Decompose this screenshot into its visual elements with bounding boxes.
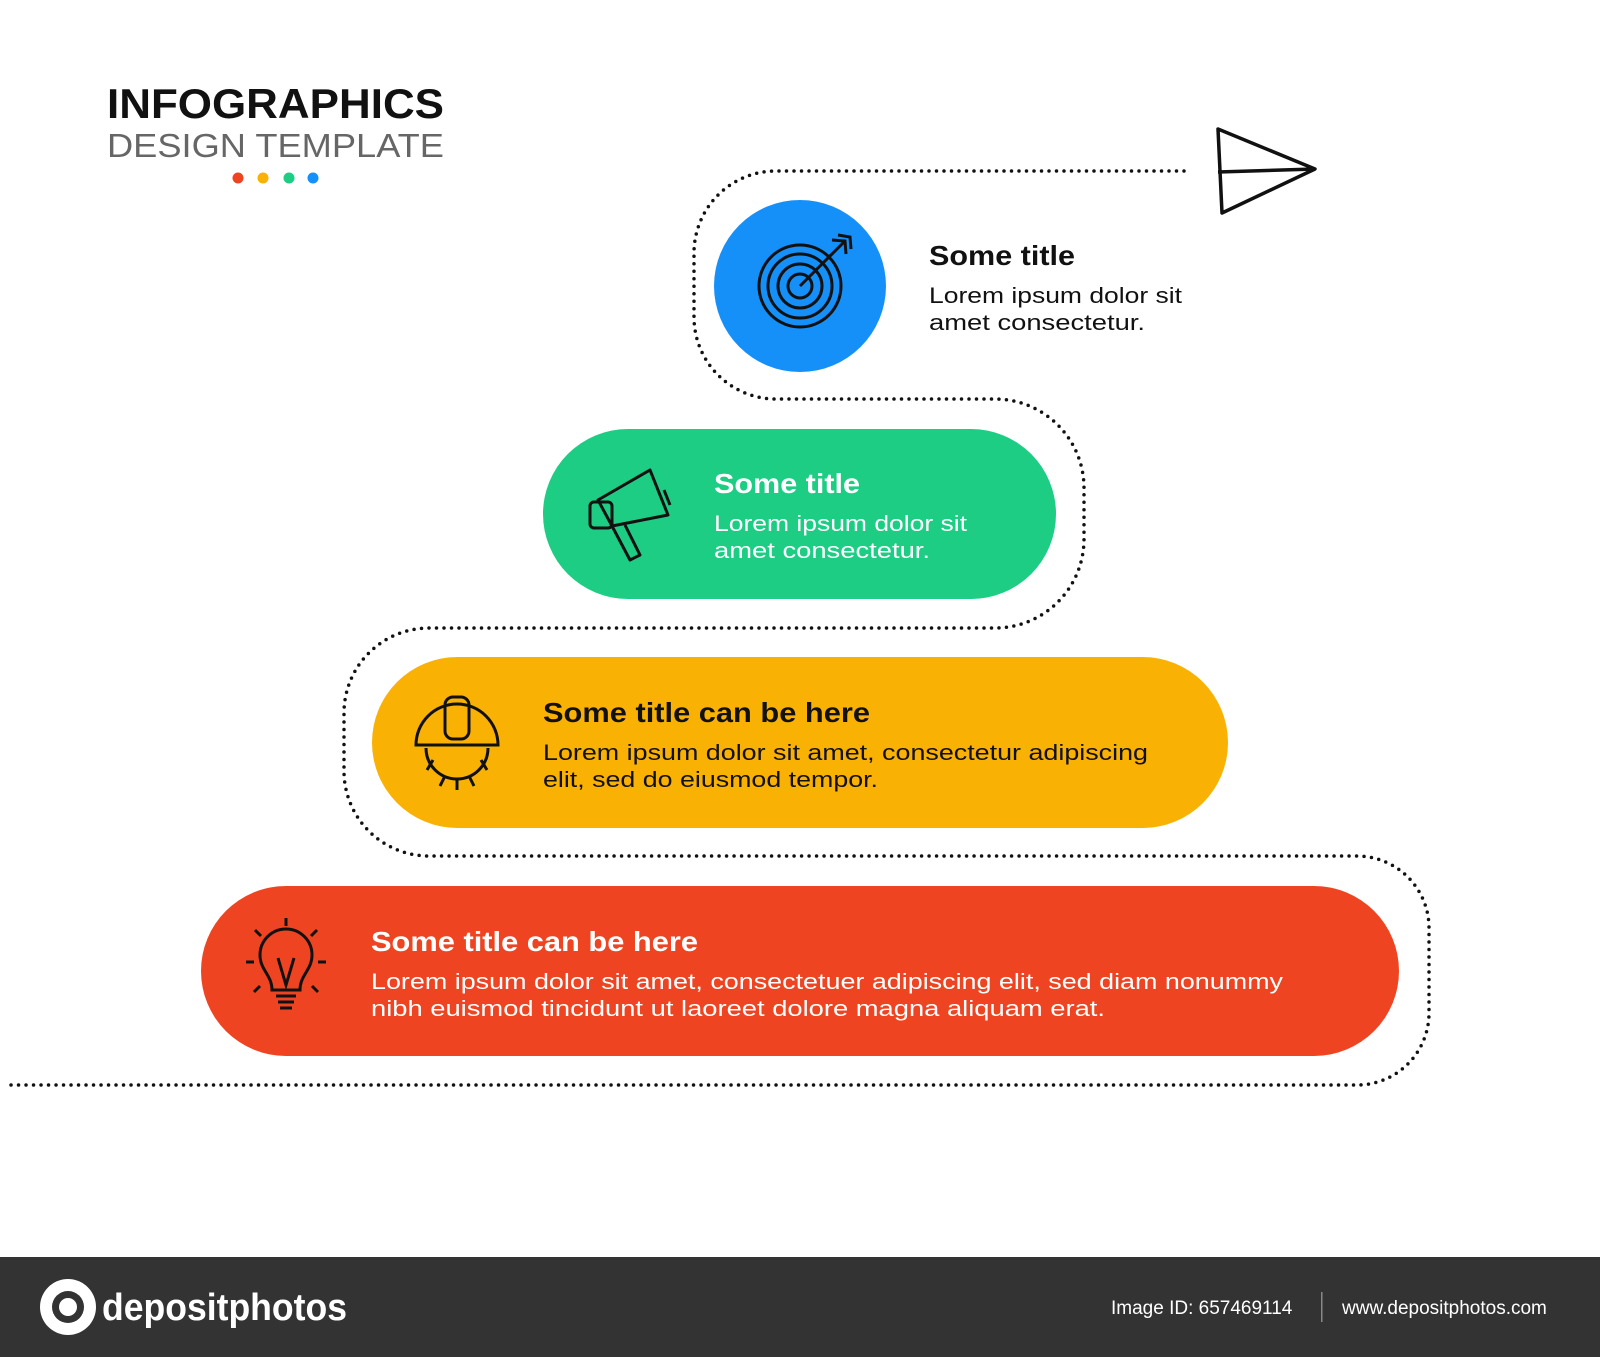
title: INFOGRAPHICS — [107, 80, 444, 127]
icon: target — [759, 235, 851, 327]
footer bar: Image ID: 657469114 — [1111, 1298, 1293, 1319]
text: step 4: Lorem ipsum dolor sit amet, consectetuer adipiscing elit, sed diam nonummy — [371, 969, 1283, 994]
text: step 1 — [929, 240, 1182, 335]
icon: light bulb — [246, 918, 326, 1008]
dotted path — [10, 171, 1429, 1085]
text: step 2: amet consectetur. — [714, 538, 930, 563]
icon: paper plane — [1218, 129, 1315, 213]
text: step 2 — [714, 468, 967, 563]
step 2: green pill — [543, 429, 1056, 599]
text: step 4: nibh euismod tincidunt ut laoreet dolore magna aliquam erat. — [371, 996, 1105, 1021]
icon: camera logo — [40, 1279, 96, 1335]
title: DESIGN TEMPLATE — [107, 127, 444, 164]
text: step 3 — [543, 697, 1148, 792]
text: step 4: Some title can be here — [371, 926, 698, 957]
step 1: blue circle — [714, 200, 1182, 372]
step 3: yellow pill — [372, 657, 1228, 828]
text: step 4 — [371, 926, 1283, 1021]
icon: megaphone — [590, 470, 670, 560]
footer bar: www.depositphotos.com — [1341, 1298, 1547, 1319]
title — [107, 80, 444, 184]
text: step 2: Some title — [714, 468, 860, 499]
footer bar — [0, 1257, 1600, 1357]
text: step 1: Lorem ipsum dolor sit — [929, 283, 1182, 308]
text: step 2: Lorem ipsum dolor sit — [714, 511, 967, 536]
text: step 1: Some title — [929, 240, 1075, 271]
text: step 3: elit, sed do eiusmod tempor. — [543, 767, 878, 792]
text: step 1: amet consectetur. — [929, 310, 1145, 335]
text: step 3: Lorem ipsum dolor sit amet, consectetur adipiscing — [543, 740, 1148, 765]
step 4: red pill — [201, 886, 1399, 1056]
icon: helmet gear — [416, 697, 498, 790]
text: step 3: Some title can be here — [543, 697, 870, 728]
footer bar: depositphotos — [102, 1287, 347, 1329]
